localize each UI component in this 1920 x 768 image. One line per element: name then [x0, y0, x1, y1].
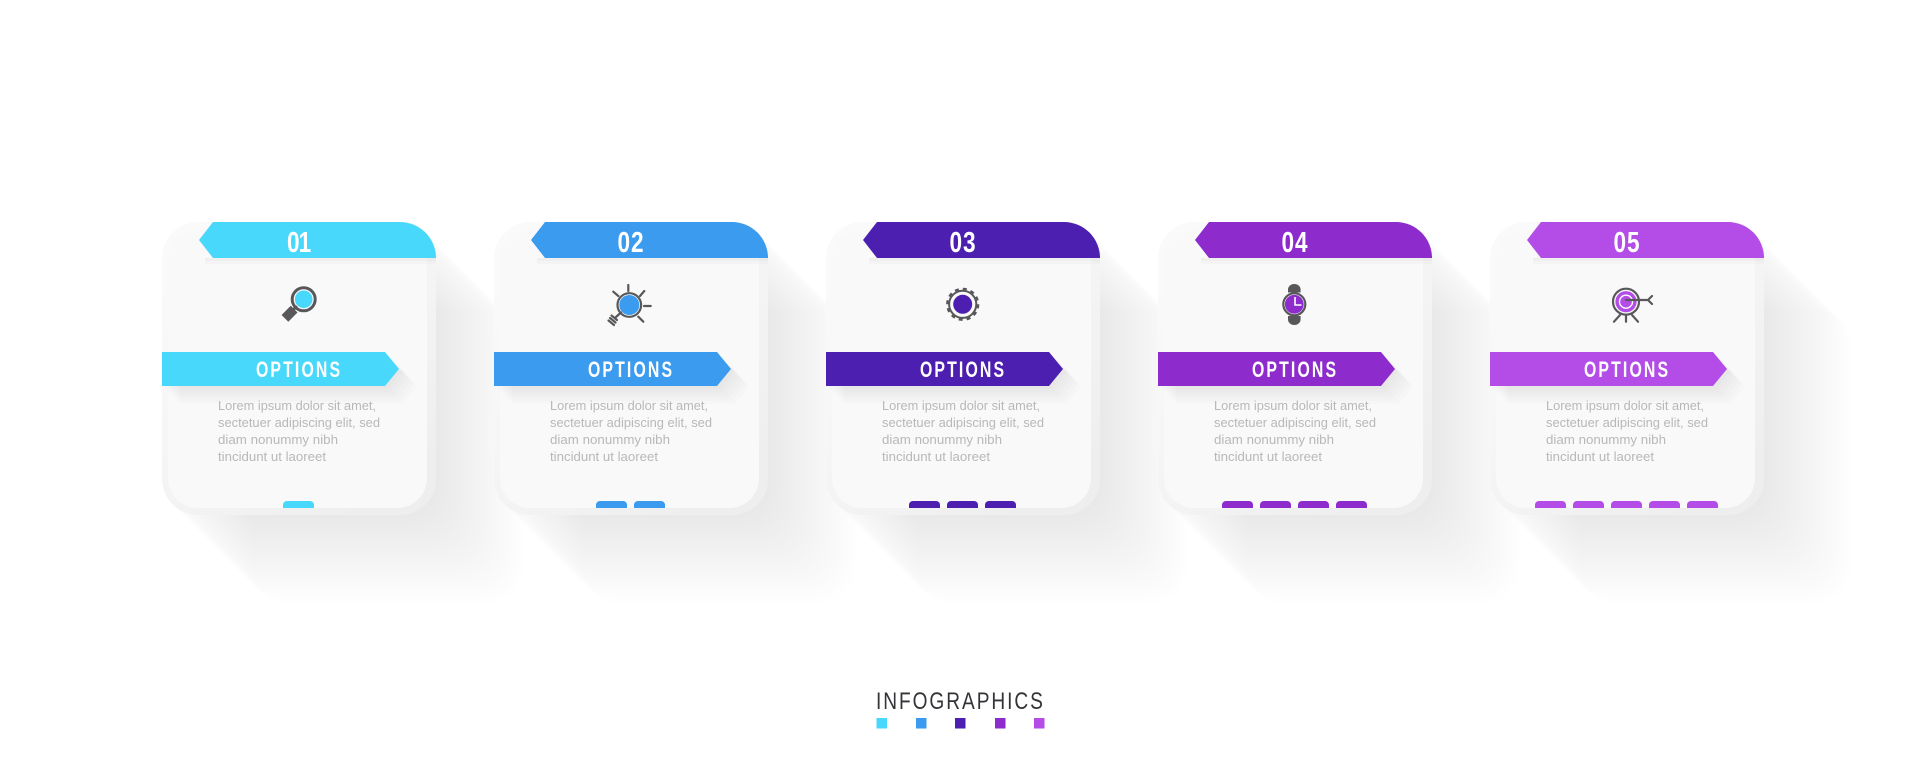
text block: tincidunt ut laoreet	[1546, 450, 1655, 464]
options bar	[1490, 352, 1745, 404]
legend squares	[876, 718, 1044, 728]
step tabs	[1222, 501, 1367, 508]
panel: card 2	[494, 222, 768, 515]
ribbon: number 05	[1527, 222, 1764, 259]
options bar: OPTIONS	[1584, 359, 1668, 383]
text block: diam nonummy nibh	[550, 433, 670, 447]
step tabs	[1535, 501, 1718, 508]
long shadow: card 4	[1158, 222, 1520, 603]
text block: Lorem ipsum dolor sit amet,	[1546, 399, 1704, 413]
ribbon: number 05: 05	[1614, 225, 1640, 259]
ribbon: number 04	[1195, 222, 1432, 259]
options bar: OPTIONS	[588, 359, 672, 383]
text block: tincidunt ut laoreet	[218, 450, 327, 464]
long shadow: card 5	[1490, 222, 1852, 603]
long shadow: card 3	[826, 222, 1188, 603]
options bar: OPTIONS	[256, 359, 340, 383]
step tabs	[283, 501, 314, 508]
ribbon: number 04: 04	[1282, 225, 1308, 259]
text block	[1214, 399, 1376, 464]
text block: sectetuer adipiscing elit, sed	[882, 416, 1044, 430]
options bar	[162, 352, 417, 404]
text block: sectetuer adipiscing elit, sed	[1546, 416, 1708, 430]
text block: Lorem ipsum dolor sit amet,	[1214, 399, 1372, 413]
text block: diam nonummy nibh	[218, 433, 338, 447]
text block: Lorem ipsum dolor sit amet,	[550, 399, 708, 413]
text block: diam nonummy nibh	[1546, 433, 1666, 447]
text block: tincidunt ut laoreet	[882, 450, 991, 464]
text block: Lorem ipsum dolor sit amet,	[218, 399, 376, 413]
icon: watch	[1283, 284, 1305, 325]
options bar	[1158, 352, 1413, 404]
text block: diam nonummy nibh	[1214, 433, 1334, 447]
step tabs	[909, 501, 1016, 508]
ribbon: number 01: 01	[287, 225, 311, 259]
text block: Lorem ipsum dolor sit amet,	[882, 399, 1040, 413]
ribbon: number 02	[531, 222, 768, 259]
panel: card 4	[1158, 222, 1432, 515]
panel: card 3	[826, 222, 1100, 515]
long shadow: card 1	[162, 222, 524, 603]
icon: magnifier	[282, 288, 315, 322]
step tabs	[596, 501, 665, 508]
icon: gear	[948, 289, 978, 319]
text block	[882, 399, 1044, 464]
icon: target with arrow	[1613, 289, 1652, 322]
text block	[1546, 399, 1708, 464]
options bar: OPTIONS	[920, 359, 1004, 383]
text block: sectetuer adipiscing elit, sed	[1214, 416, 1376, 430]
text block: diam nonummy nibh	[882, 433, 1002, 447]
panel: card 5	[1490, 222, 1764, 515]
options bar: OPTIONS	[1252, 359, 1336, 383]
options bar	[494, 352, 749, 404]
text block: sectetuer adipiscing elit, sed	[550, 416, 712, 430]
text block: tincidunt ut laoreet	[1214, 450, 1323, 464]
title: INFOGRAPHICS	[876, 687, 1043, 715]
ribbon: number 01	[199, 222, 436, 259]
text block: tincidunt ut laoreet	[550, 450, 659, 464]
options bar	[826, 352, 1081, 404]
ribbon: number 03	[863, 222, 1100, 259]
ribbon: number 03: 03	[950, 225, 976, 259]
icon: light bulb	[608, 285, 651, 325]
text block: sectetuer adipiscing elit, sed	[218, 416, 380, 430]
panel: card 1	[162, 222, 436, 515]
text block	[550, 399, 712, 464]
long shadow: card 2	[494, 222, 856, 603]
text block	[218, 399, 380, 464]
ribbon: number 02: 02	[618, 225, 644, 259]
